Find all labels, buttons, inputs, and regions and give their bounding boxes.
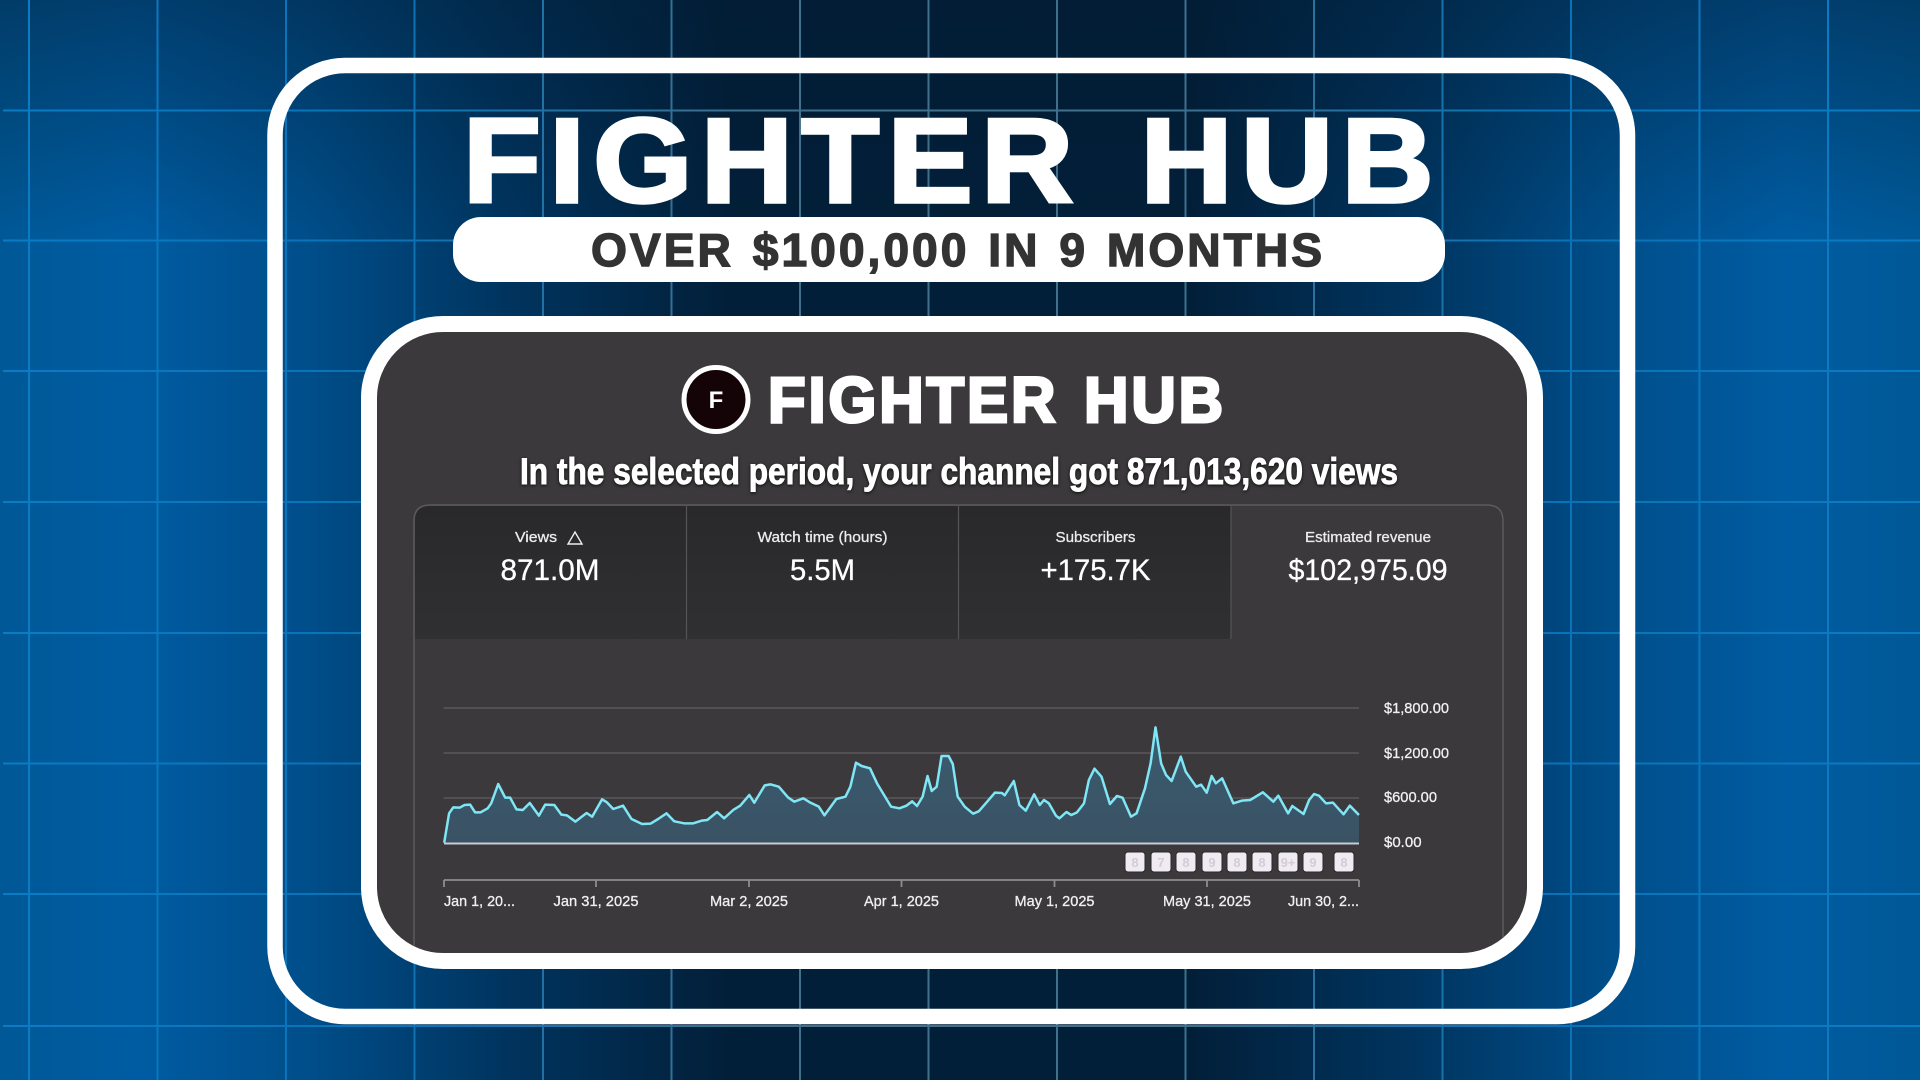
- metric: subscribers: Subscribers: [1056, 529, 1136, 546]
- video markers: 8: [1233, 855, 1241, 870]
- x axis labels: Apr 1, 2025: [864, 893, 939, 910]
- panel background: [369, 324, 1535, 961]
- metric: estimated revenue: $102,975.09: [1288, 554, 1448, 587]
- video markers: 8: [1258, 855, 1266, 870]
- channel name: FIGHTER HUB: [768, 364, 1226, 436]
- video markers: 7: [1157, 855, 1165, 870]
- x axis labels: May 1, 2025: [1014, 893, 1094, 910]
- metric: subscribers: [959, 506, 1231, 639]
- video markers: 9: [1208, 855, 1216, 870]
- metric: estimated revenue: [1288, 529, 1448, 587]
- metric: subscribers: +175.7K: [1040, 554, 1150, 587]
- video markers: 8: [1340, 855, 1348, 870]
- headline: In the selected period, your channel got 871,013,620 views: [520, 451, 1398, 492]
- x axis: [444, 880, 1359, 887]
- metric: views: 871.0M: [500, 554, 600, 587]
- revenue line chart: [444, 700, 1449, 910]
- panel: analytics dashboard: [369, 324, 1535, 961]
- outer white frame: [275, 66, 1628, 1016]
- x axis labels: Jan 1, 20...: [444, 893, 515, 910]
- x axis labels: Mar 2, 2025: [710, 893, 788, 910]
- metric: views: Views: [515, 529, 557, 546]
- video markers: 9: [1309, 855, 1317, 870]
- metric: watch time: 5.5M: [790, 554, 855, 587]
- x axis labels: Jun 30, 2...: [1288, 893, 1359, 910]
- y axis labels: [1384, 700, 1449, 851]
- metric: views: [415, 506, 686, 639]
- metric: watch time: [687, 506, 958, 639]
- subtitle pill: [453, 217, 1445, 282]
- icon: channel logo: F: [709, 387, 723, 414]
- y axis labels: $0.00: [1384, 834, 1422, 851]
- subtitle pill: OVER $100,000 IN 9 MONTHS: [591, 224, 1325, 276]
- y axis labels: $1,800.00: [1384, 700, 1449, 717]
- title: FIGHTER HUB: [463, 94, 1442, 228]
- y axis labels: $600.00: [1384, 789, 1437, 806]
- chart area and line: [444, 727, 1359, 843]
- video markers: 9+: [1281, 855, 1296, 870]
- y axis labels: $1,200.00: [1384, 745, 1449, 762]
- video markers: [1125, 852, 1354, 872]
- metric: watch time: Watch time (hours): [758, 529, 888, 546]
- icon: channel logo: [684, 368, 748, 432]
- metrics table: [414, 505, 1503, 953]
- metric: estimated revenue: Estimated revenue: [1305, 529, 1431, 546]
- video markers: 8: [1131, 855, 1139, 870]
- x axis labels: May 31, 2025: [1163, 893, 1251, 910]
- x axis labels: Jan 31, 2025: [554, 893, 638, 910]
- x axis labels: [444, 893, 1359, 910]
- video markers: 8: [1182, 855, 1190, 870]
